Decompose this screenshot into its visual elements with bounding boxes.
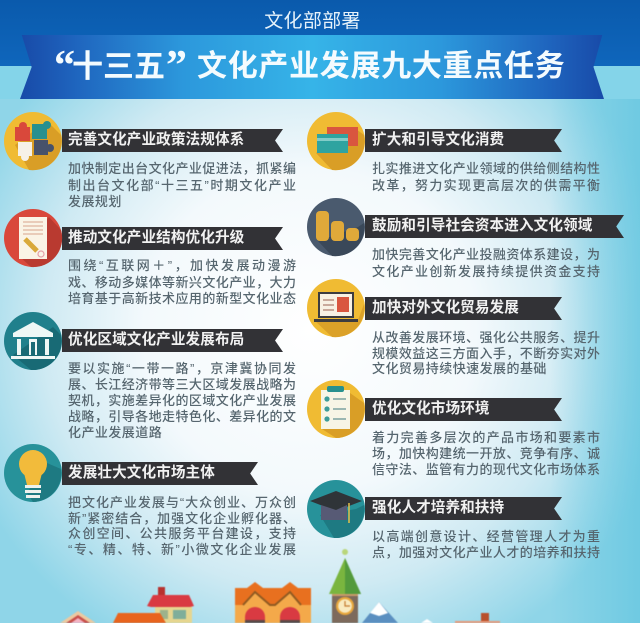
- right item 5: [307, 480, 600, 560]
- body text: 把文化产业发展与“大众创业、万众创: [68, 495, 296, 510]
- side strip behind ribbon: [0, 66, 640, 99]
- title: 文化产业发展九大重点任务: [197, 50, 565, 83]
- body text: 新”紧密结合，加强文化企业孵化器、: [68, 511, 296, 526]
- icon: museum: [4, 312, 62, 370]
- title: “: [54, 43, 75, 89]
- ribbon heading: 加快对外文化贸易发展: [372, 300, 519, 316]
- title: ”: [166, 43, 187, 89]
- body text: 众创空间、公共服务平台建设，支持: [68, 526, 296, 541]
- body text: 展、长江经济带等三大区域发展战略为: [68, 377, 296, 392]
- small peak: [421, 619, 433, 623]
- body text: [372, 430, 600, 477]
- icon: light bulb: [4, 444, 62, 502]
- body text: [68, 161, 296, 209]
- header band: [0, 0, 640, 66]
- subtitle: 文化部部署: [264, 11, 361, 32]
- body text: 要以实施“一带一路”，京津冀协同发: [68, 361, 296, 376]
- body text: 信守法、监管有力的现代文化市场体系: [372, 462, 600, 477]
- body text: “专、精、特、新”小微文化企业发展: [68, 542, 296, 557]
- ribbon heading: 鼓励和引导社会资本进入文化领域: [372, 218, 592, 234]
- right item 2: [307, 198, 624, 278]
- orange roof house: [113, 613, 166, 623]
- icon: document and stamp: [4, 209, 62, 268]
- icon: graduation cap: [307, 480, 365, 538]
- body text: [372, 161, 600, 192]
- body text: 制出台文化部“十三五”时期文化产业: [68, 178, 296, 192]
- ribbon heading: [365, 398, 562, 421]
- icon: coins: [307, 198, 365, 256]
- left item 2: [4, 209, 296, 306]
- right item 4: [307, 380, 600, 477]
- body text: 文化贸易持续快速发展的基础: [372, 361, 547, 376]
- ribbon heading: 完善文化产业政策法规体系: [68, 132, 244, 148]
- ribbon heading: 优化文化市场环境: [372, 401, 490, 417]
- right house: [455, 613, 500, 623]
- ribbon heading: [365, 297, 562, 320]
- body text: 培育基于高新技术应用的新型文化业态: [68, 291, 296, 306]
- city skyline: [60, 548, 501, 623]
- body text: [68, 258, 296, 306]
- ribbon heading: [62, 329, 283, 352]
- body text: 规模效益这三方面入手，不断夯实对外: [372, 346, 600, 361]
- body text: 发展规划: [68, 194, 122, 209]
- body text: 扎实推进文化产业领域的供给侧结构性: [372, 161, 600, 176]
- red roof house: [147, 587, 194, 623]
- body text: [68, 495, 296, 557]
- icon: cards: [307, 112, 365, 170]
- mountain: [362, 602, 398, 623]
- body text: 加快制定出台文化产业促进法，抓紧编: [68, 161, 296, 176]
- ribbon heading: [62, 129, 283, 152]
- ribbon heading: 强化人才培养和扶持: [372, 500, 504, 516]
- left item 1: [4, 112, 296, 209]
- body text: 加快完善文化产业投融资体系建设，为: [372, 247, 600, 262]
- left item 4: [4, 444, 296, 557]
- body text: 场，加快构建统一开放、竞争有序、诚: [372, 446, 600, 461]
- body text: 改革，努力实现更高层次的供需平衡: [372, 178, 600, 192]
- body text: 契机，实施差异化的区域文化产业发展: [68, 393, 296, 408]
- ribbon heading: [365, 215, 624, 238]
- body text: [68, 361, 296, 440]
- body text: 战略，引导各地走特色化、差异化的文: [68, 409, 296, 424]
- title: [56, 50, 564, 80]
- ribbon heading: 推动文化产业结构优化升级: [68, 230, 244, 246]
- icon: laptop: [307, 279, 365, 338]
- ribbon heading: 优化区域文化产业发展布局: [68, 332, 244, 348]
- orange building: [235, 582, 311, 623]
- ribbon heading: [62, 462, 258, 485]
- right item 3: [307, 279, 600, 376]
- icon: puzzle: [4, 112, 62, 170]
- left item 3: [4, 312, 296, 440]
- pink house: [60, 611, 96, 623]
- body text: [372, 247, 600, 278]
- ribbon heading: 发展壮大文化市场主体: [68, 465, 215, 481]
- body text: 化产业发展道路: [68, 425, 162, 440]
- title: 十三五: [72, 49, 165, 84]
- ribbon heading: [365, 497, 562, 520]
- body text: [372, 529, 600, 560]
- title ribbon: [20, 35, 604, 99]
- body text: 围绕“互联网＋”，加快发展动漫游: [68, 258, 296, 273]
- icon: clipboard: [307, 380, 365, 438]
- ribbon heading: 扩大和引导文化消费: [372, 132, 504, 148]
- ribbon heading: [62, 227, 283, 250]
- body text: 着力完善多层次的产品市场和要素市: [372, 430, 600, 445]
- clock tower: [329, 549, 361, 623]
- body text: 文化产业创新发展持续提供资金支持: [372, 264, 600, 278]
- body text: 以高端创意设计、经营管理人才为重: [372, 529, 600, 544]
- body text: 从改善发展环境、强化公共服务、提升: [372, 330, 600, 345]
- body text: 戏、移动多媒体等新兴文化产业，大力: [68, 274, 296, 290]
- body text: 点，加强对文化产业人才的培养和扶持: [372, 545, 600, 560]
- right item 1: [307, 112, 600, 192]
- ribbon heading: [365, 129, 562, 152]
- body text: [372, 330, 600, 376]
